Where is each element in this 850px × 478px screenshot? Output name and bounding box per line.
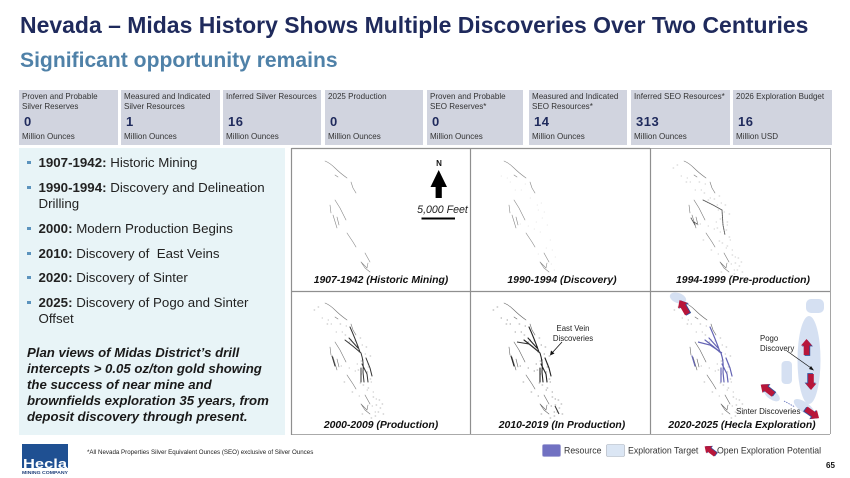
map: 1990-1994 discovery [501, 161, 617, 286]
stat: measured and indicated SEO resources [529, 90, 627, 145]
hecla logo: Hecla [23, 457, 68, 471]
stat: 2026 exploration budget: Million USD [736, 132, 778, 141]
stat: 2026 exploration budget: 2026 Exploration Budget [736, 92, 824, 101]
map: 2020-2025 hecla exploration [667, 290, 824, 431]
sinter discoveries label: Sinter Discoveries [736, 407, 800, 416]
timeline item 2025 [27, 295, 248, 326]
stat: proven and probable SEO reserves: Proven and Probable [430, 92, 506, 101]
map: 2010-2019 in production [493, 303, 626, 431]
caption 2010-2019: 2010-2019 (In Production) [498, 420, 626, 431]
timeline item 2020: 2020: Discovery of Sinter [38, 270, 188, 285]
footnote: *All Nevada Properties Silver Equivalent Ounces (SEO) exclusive of Silver Ounces [87, 449, 313, 456]
plan views description: deposit discovery through present. [27, 409, 248, 424]
legend: Open Exploration Potential [717, 446, 821, 456]
stat: proven and probable silver reserves: Million Ounces [22, 132, 75, 141]
stat: inferred SEO resources: Million Ounces [634, 132, 687, 141]
timeline item 1990-1994: 1990-1994: Discovery and Delineation [38, 180, 265, 195]
stat: measured and indicated SEO resources: Million Ounces [532, 132, 585, 141]
stat: inferred silver resources: Inferred Silver Resources [226, 92, 317, 101]
open exploration potential arrows [675, 297, 822, 423]
stat: proven and probable silver reserves: Silver Reserves [22, 102, 78, 110]
exploration target areas [668, 290, 824, 418]
panel: timeline and description [19, 148, 285, 435]
map: 1994-1999 pre-production [673, 161, 811, 286]
timeline item 2025: 2025: Discovery of Pogo and Sinter [38, 295, 248, 310]
map frame [291, 148, 830, 435]
title: Nevada – Midas History Shows Multiple Discoveries Over Two Centuries [20, 12, 808, 38]
east vein discoveries callout: East Vein [557, 324, 589, 333]
stat: measured and indicated SEO resources: Measured and Indicated [532, 92, 618, 101]
legend: Exploration Target [628, 446, 699, 456]
stat: proven and probable silver reserves [19, 90, 118, 145]
stat: inferred SEO resources: 313 [636, 114, 659, 129]
stat: 2025 production: 2025 Production [328, 92, 387, 101]
timeline item 1907-1942: 1907-1942: Historic Mining [38, 155, 197, 170]
stat: proven and probable SEO reserves: SEO Reserves* [430, 102, 486, 110]
stat: proven and probable SEO reserves [427, 90, 523, 145]
map: 1907-1942 historic mining [314, 161, 449, 286]
plan views description [27, 345, 269, 424]
pogo discovery callout [760, 334, 814, 370]
stat: inferred SEO resources [631, 90, 730, 145]
north arrow and scale bar: 5,000 Feet [417, 204, 469, 216]
plan views description: intercepts > 0.05 oz/ton gold showing [27, 361, 262, 376]
stat: proven and probable SEO reserves: Million Ounces [430, 132, 483, 141]
stat: measured and indicated silver resources [121, 90, 220, 145]
stat: inferred silver resources: Million Ounces [226, 132, 279, 141]
stat: 2026 exploration budget: 16 [738, 114, 753, 129]
legend [542, 442, 821, 459]
stat: measured and indicated SEO resources: 14 [534, 114, 549, 129]
timeline item 2010: 2010: Discovery of East Veins [38, 246, 220, 261]
stat: inferred silver resources [223, 90, 321, 145]
stat: measured and indicated silver resources: 1 [126, 114, 134, 129]
stat: proven and probable SEO reserves: 0 [432, 114, 440, 129]
stat: measured and indicated SEO resources: SEO Resources* [532, 102, 593, 110]
north arrow and scale bar [417, 159, 469, 220]
stat: measured and indicated silver resources: Silver Resources [124, 102, 185, 110]
timeline item 1990-1994 [27, 180, 265, 211]
pogo discovery callout: Discovery [760, 344, 794, 353]
east vein discoveries callout: Discoveries [553, 334, 593, 343]
subtitle: Significant opportunity remains [20, 49, 338, 72]
caption 2000-2009: 2000-2009 (Production) [323, 420, 439, 431]
legend: Resource [564, 446, 602, 456]
pogo discovery callout: Pogo [760, 334, 779, 343]
stat: inferred SEO resources: Inferred SEO Resources* [634, 92, 725, 101]
stat: proven and probable silver reserves: Proven and Probable [22, 92, 98, 101]
timeline item 2025: Offset [38, 311, 74, 326]
caption 1994-1999: 1994-1999 (Pre-production) [676, 275, 811, 286]
stat: measured and indicated silver resources: Measured and Indicated [124, 92, 210, 101]
stat: proven and probable silver reserves: 0 [24, 114, 32, 129]
plan views description: the success of near mine and [27, 377, 212, 392]
map: 2000-2009 production [314, 303, 439, 431]
hecla logo: MINING COMPANY [22, 470, 68, 475]
caption 1907-1942: 1907-1942 (Historic Mining) [314, 275, 449, 286]
stat: measured and indicated silver resources: Million Ounces [124, 132, 177, 141]
stat: inferred silver resources: 16 [228, 114, 243, 129]
stat: 2025 production [325, 90, 423, 145]
timeline item 2000: 2000: Modern Production Begins [38, 221, 233, 236]
page number: 65 [826, 461, 835, 470]
east vein discoveries callout [550, 324, 593, 356]
plan views description: Plan views of Midas District’s drill [27, 345, 239, 360]
north arrow and scale bar: N [436, 159, 442, 168]
caption 2020-2025: 2020-2025 (Hecla Exploration) [667, 420, 816, 431]
timeline item 1990-1994: Drilling [38, 196, 79, 211]
plan views description: brownfields exploration 35 years, from [27, 393, 269, 408]
stat: 2025 production: 0 [330, 114, 338, 129]
hecla logo [22, 444, 68, 475]
caption 1990-1994: 1990-1994 (Discovery) [507, 275, 617, 286]
stat: 2026 exploration budget [733, 90, 832, 145]
stat: 2025 production: Million Ounces [328, 132, 381, 141]
